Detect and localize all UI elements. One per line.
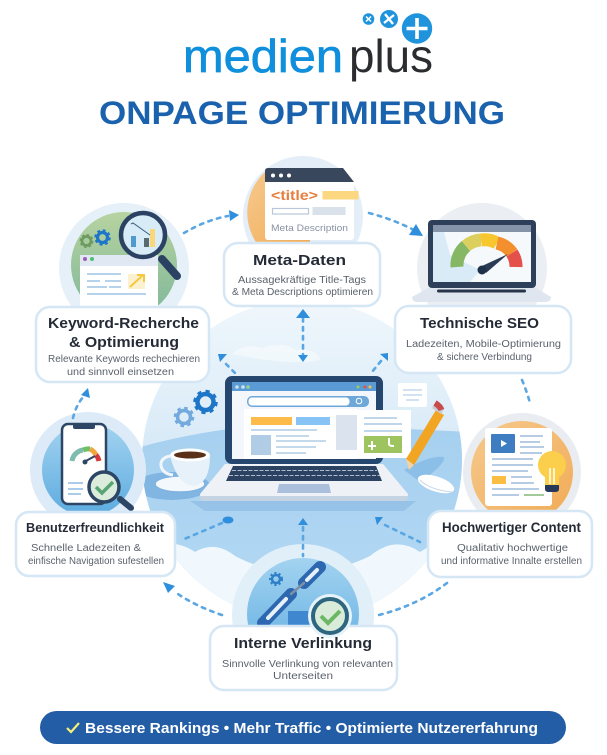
description line 1: Sinnvolle Verlinkung von relevanten (222, 659, 393, 670)
browser content card (244, 409, 357, 459)
description line 1: Schnelle Ladezeiten & (31, 543, 141, 554)
panel: Benutzerfreundlichkeit (16, 412, 175, 576)
arrow: links to usability (163, 582, 222, 615)
panel: Interne Verlinkung (210, 544, 397, 690)
search bar (247, 396, 369, 407)
cursor box (288, 611, 310, 627)
logo icon: large plus bubble (402, 13, 432, 44)
panel: Technische SEO (395, 203, 571, 373)
icon backdrop circle (417, 203, 547, 333)
speed gauge (457, 240, 516, 267)
document icon (485, 428, 552, 506)
magnifying glass with check (89, 472, 131, 508)
blue gear (96, 230, 110, 244)
banner pill (40, 711, 566, 744)
panel: Keyword-Recherche (36, 203, 209, 382)
laptop keyboard (226, 466, 382, 481)
icon: small light gear (175, 408, 193, 426)
orange accent circle (247, 172, 310, 250)
icon backdrop circle (30, 412, 146, 528)
description line 2: und informative Innalte erstellen (441, 556, 582, 567)
description line 2: einfische Navigation sufestellen (28, 556, 164, 567)
laptop base (200, 464, 408, 501)
floating article card (357, 410, 411, 458)
laptop (190, 376, 416, 511)
heading: Hochwertiger Content (442, 519, 581, 535)
laptop with gauge (412, 220, 551, 302)
card (224, 243, 380, 306)
heading line 2: & Optimierung (69, 334, 179, 351)
arrow: usability to keyword (73, 388, 90, 418)
arrow: technical to content (522, 380, 530, 403)
laptop screen (225, 376, 383, 464)
arrow: keyword to meta (184, 210, 239, 233)
light bulb icon (538, 451, 566, 492)
coffee cup (155, 448, 210, 492)
panel: Hochwertiger Content (428, 413, 592, 577)
description line 1: Aussagekräftige Title-Tags (238, 275, 366, 286)
computer mouse (416, 471, 456, 497)
floating note (398, 383, 427, 407)
blue circle (42, 424, 134, 516)
panel: Meta-Daten (224, 156, 380, 306)
card (36, 307, 209, 382)
logo wordmark plus: plus (349, 30, 433, 82)
description line 2: & Meta Descriptions optimieren (232, 287, 373, 298)
browser window icon (80, 255, 158, 315)
orange circle (471, 421, 573, 523)
browser window icon: Meta Description (271, 223, 348, 234)
heading: Technische SEO (420, 315, 539, 332)
card (210, 626, 397, 690)
icon: large blue gear (195, 392, 216, 412)
arrow: laptop to content (375, 517, 420, 542)
icon backdrop circle (232, 544, 374, 686)
description line 1: Qualitativ hochwertige (457, 543, 568, 554)
heading: Benutzerfreundlichkeit (26, 520, 165, 535)
browser window icon (265, 168, 358, 240)
blue circle (247, 558, 359, 670)
heading: Meta-Daten (253, 252, 346, 269)
browser window icon: <title> (271, 188, 318, 203)
title: ONPAGE OPTIMIERUNG (99, 95, 505, 131)
green circle (71, 212, 177, 318)
description line 2: und sinnvoll einsetzen (67, 367, 174, 378)
icon backdrop circle (59, 203, 189, 333)
smartphone with gauge (62, 424, 106, 504)
card (428, 511, 592, 577)
logo: medienplus (183, 10, 433, 82)
chain link icon (263, 567, 320, 623)
icon backdrop circle (463, 413, 581, 531)
green gear (80, 235, 92, 247)
arrow: links to laptop (298, 518, 308, 556)
description line 2: Unterseiten (273, 671, 333, 682)
card (395, 306, 571, 373)
description line 1: Relevante Keywords rechechieren (48, 354, 200, 365)
arrow: laptop to keyword (218, 354, 237, 375)
logo icon: medium cross bubble (380, 10, 398, 28)
arrow: meta to technical (369, 213, 423, 236)
logo icon: small x bubble (363, 13, 374, 25)
logo wordmark medien: medien (183, 30, 343, 82)
heading: Interne Verlinkung (234, 635, 372, 652)
icon backdrop circle (243, 156, 363, 276)
card (16, 512, 175, 576)
check badge (308, 594, 352, 638)
magnifying glass with chart (121, 213, 177, 276)
laptop touchpad (277, 484, 331, 493)
arrow: meta and laptop (296, 309, 310, 362)
arrow: laptop to technical (372, 353, 388, 372)
icon: check mark (67, 723, 79, 732)
pencil (406, 403, 444, 470)
arrow: laptop to usability (182, 516, 234, 540)
bottom banner (40, 711, 566, 744)
small gear (270, 573, 282, 585)
banner text: Bessere Rankings • Mehr Traffic • Optimierte Nutzererfahrung (85, 720, 538, 737)
heading line 1: Keyword-Recherche (48, 315, 199, 332)
description line 2: & sichere Verbindung (437, 352, 532, 363)
scene background circle (142, 308, 462, 604)
arrow: content to links (379, 583, 447, 615)
central illustration (142, 308, 462, 604)
description line 1: Ladezeiten, Mobile-Optimierung (406, 339, 561, 350)
